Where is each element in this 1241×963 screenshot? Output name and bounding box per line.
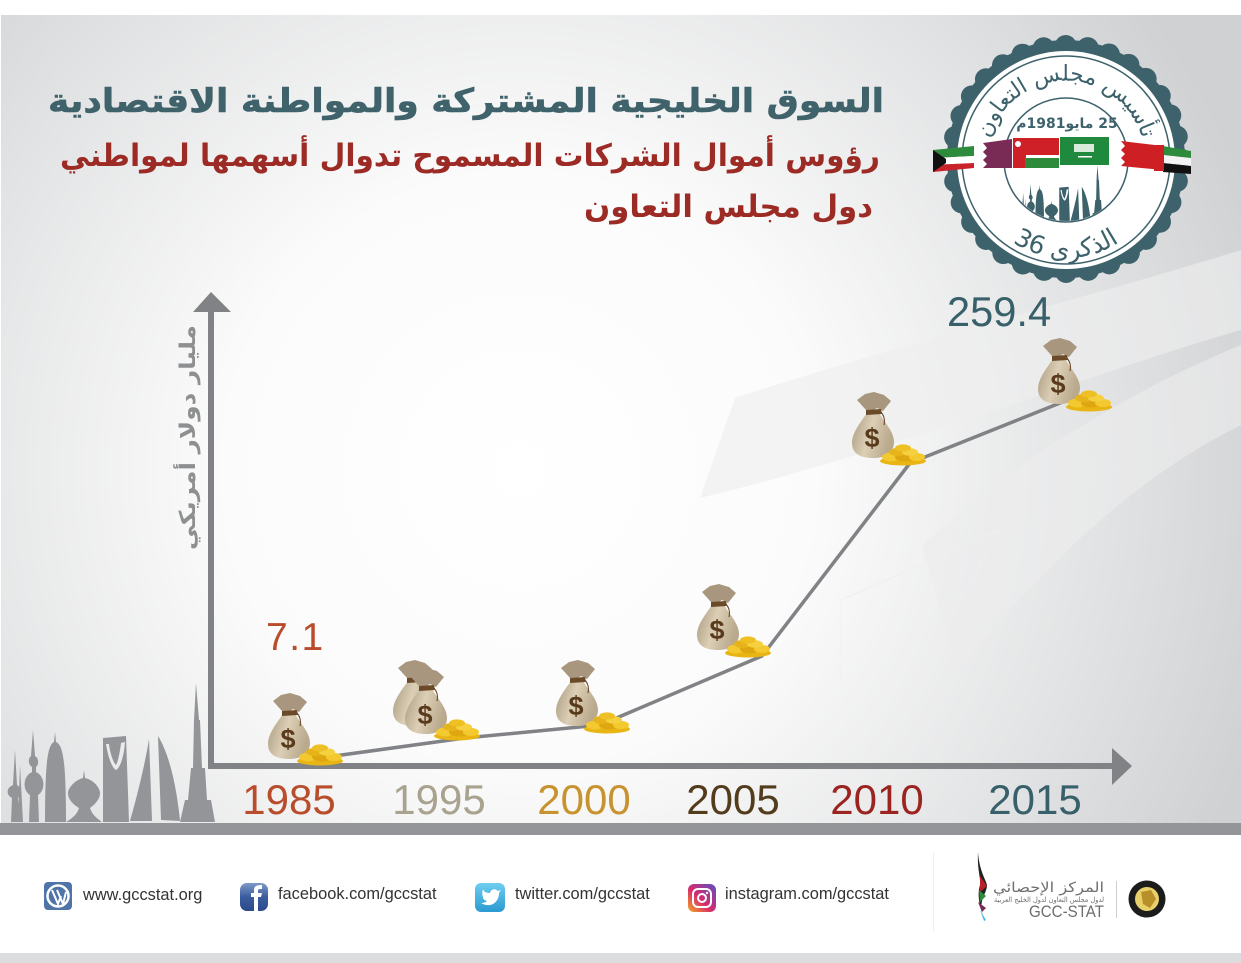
- anniversary seal: تأسيس مجلس التعاون: [982, 64, 1160, 137]
- facebook link: [240, 883, 437, 911]
- year labels: 2010: [830, 776, 924, 823]
- bags 1995: $: [417, 700, 433, 730]
- year labels: [242, 776, 1082, 823]
- instagram link: instagram.com/gccstat: [725, 885, 889, 903]
- bag 2000: $: [568, 691, 584, 721]
- anniversary seal: 25 مايو1981م: [1016, 116, 1118, 132]
- bag 2005: $: [709, 615, 725, 645]
- decorative swooshes: [700, 250, 1241, 686]
- gcc-stat logo: [933, 852, 1166, 932]
- subtitle line 1: رؤوس أموال الشركات المسموح تدوال أسهمها لمواطني: [60, 135, 880, 174]
- title: السوق الخليجية المشتركة والمواطنة الاقتصادية: [48, 81, 884, 121]
- value 259.4: 259.4: [947, 288, 1051, 335]
- bottom strip: [0, 953, 1241, 963]
- gcc-stat logo: لدول مجلس التعاون لدول الخليج العربية: [994, 896, 1104, 904]
- gcc-stat logo: GCC-STAT: [1029, 902, 1104, 921]
- bags 1995: [393, 660, 480, 740]
- anniversary seal: الذكرى 36: [1014, 227, 1118, 264]
- bag 2010: $: [864, 423, 880, 453]
- bag 2015: $: [1050, 369, 1066, 399]
- ground bar: [0, 823, 1241, 835]
- year labels: 1985: [242, 776, 336, 823]
- instagram link: [688, 884, 889, 912]
- bag 2005: [697, 584, 771, 658]
- value 7.1: 7.1: [266, 616, 325, 659]
- anniversary seal: [933, 35, 1191, 283]
- year labels: 2005: [686, 776, 780, 823]
- flags: [933, 137, 1191, 174]
- bag 2000: [556, 660, 630, 734]
- y axis: [193, 292, 231, 769]
- trend line: [327, 397, 1075, 757]
- twitter link: twitter.com/gccstat: [515, 885, 650, 903]
- year labels: 2015: [988, 776, 1082, 823]
- bag 1985: $: [280, 724, 296, 754]
- year labels: 1995: [392, 776, 486, 823]
- y axis label: مليار دولار أمريكي: [172, 325, 201, 550]
- twitter link: [475, 883, 650, 912]
- bag 2015: [1038, 338, 1112, 412]
- bag 2010: [852, 392, 926, 466]
- facebook link: facebook.com/gccstat: [278, 885, 437, 903]
- subtitle line 2: دول مجلس التعاون: [584, 189, 873, 225]
- wordpress link: [44, 882, 202, 910]
- footer panel: [0, 835, 1241, 953]
- skyline: [8, 683, 215, 822]
- wordpress link: www.gccstat.org: [82, 886, 202, 904]
- x axis: [208, 748, 1132, 785]
- bag 1985: [268, 693, 343, 766]
- year labels: 2000: [537, 776, 631, 823]
- gcc-stat logo: المركز الإحصائي: [993, 880, 1104, 896]
